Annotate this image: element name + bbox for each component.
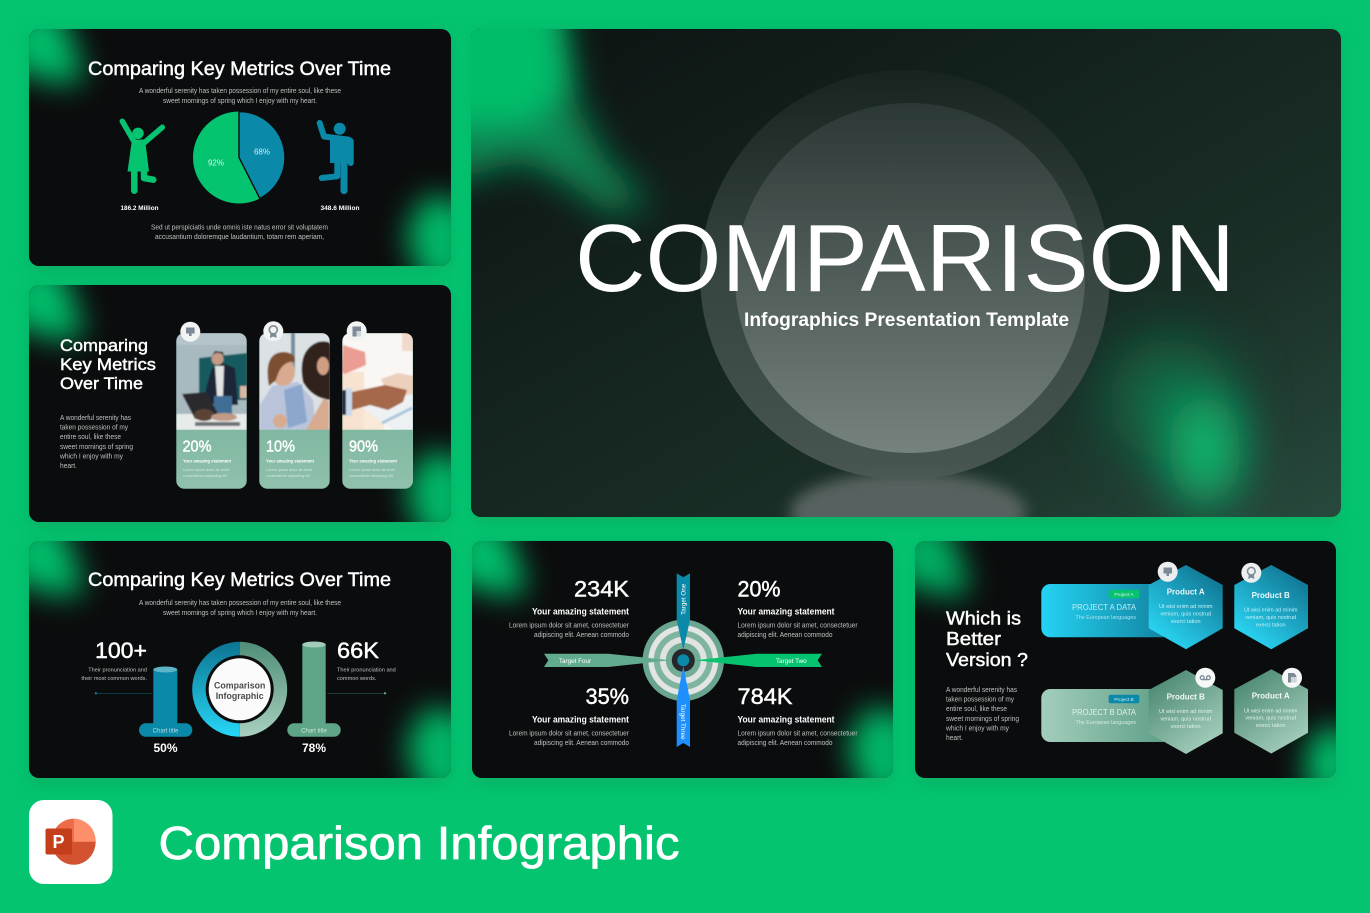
description xyxy=(1244,608,1298,628)
body text: A wonderful serenity has xyxy=(946,687,1017,694)
stat: 234K: 234K xyxy=(574,576,629,602)
lorem: Lorem ipsum dolor sit amet xyxy=(349,468,396,472)
lorem: adipiscing elit. Aenean commodo xyxy=(534,632,629,639)
icon: tape xyxy=(1195,668,1215,688)
description xyxy=(1159,709,1213,730)
target rings xyxy=(643,620,724,701)
body text: taken possession of my xyxy=(60,425,128,432)
description: exerci tation xyxy=(1256,723,1286,729)
hexagon: product A top xyxy=(1149,562,1223,649)
stat: 234K xyxy=(509,576,630,639)
description: Ut wisi enim ad minim xyxy=(1159,709,1213,715)
donut chart xyxy=(192,642,287,737)
icon: PowerPoint app: P xyxy=(52,832,65,852)
project subtitle: The European languages xyxy=(1075,720,1136,726)
body text: heart. xyxy=(60,463,77,470)
description: Ut wisi enim ad minim xyxy=(1244,608,1298,614)
arrow label: Target Three xyxy=(679,704,686,740)
heading xyxy=(60,336,156,393)
caption left: Their pronunciation and xyxy=(88,668,147,674)
stat: 66K: 66K xyxy=(337,638,379,663)
statement: Your amazing statement xyxy=(738,714,834,724)
heading: Better xyxy=(946,629,1001,649)
stat: 20% xyxy=(182,438,212,455)
body text: sweet mornings of spring xyxy=(60,444,133,451)
description: exerci tation xyxy=(1171,724,1201,730)
body text: taken possession of my xyxy=(946,697,1014,704)
lorem xyxy=(738,730,858,747)
description: exerci tation xyxy=(1256,622,1286,628)
body text xyxy=(59,415,133,470)
circular icon: document xyxy=(347,321,367,341)
stat: 100+: 100+ xyxy=(95,638,147,663)
icon: screen xyxy=(1158,562,1178,582)
description: veniam, quis nostrud xyxy=(1245,716,1296,722)
lorem: Lorem ipsum dolor sit amet xyxy=(183,468,230,472)
arrow: target two xyxy=(695,654,822,667)
circular icon: award xyxy=(263,321,283,341)
heading: Version ? xyxy=(946,650,1028,670)
lorem: Lorem ipsum dolor sit amet, consectetuer xyxy=(738,730,858,738)
description xyxy=(1244,708,1298,729)
pie value green: 92% xyxy=(208,158,224,168)
icon: award xyxy=(1241,563,1261,583)
lorem: Lorem ipsum dolor sit amet, consectetuer xyxy=(738,622,858,630)
statement: Your amazing statement xyxy=(349,458,397,463)
pie value blue: 68% xyxy=(254,148,270,156)
heading: Which is xyxy=(946,608,1021,628)
project title: PROJECT A DATA xyxy=(1072,603,1137,612)
lorem xyxy=(183,468,230,478)
lorem: consectetuer adipiscing elit xyxy=(183,474,228,478)
intro text xyxy=(139,88,341,105)
icon: PowerPoint app xyxy=(29,800,112,884)
stat: 90% xyxy=(349,438,378,455)
statement: Your amazing statement xyxy=(532,714,629,724)
hexagon: product B bottom xyxy=(1149,668,1223,754)
lorem: Lorem ipsum dolor sit amet, consectetuer xyxy=(509,730,630,738)
caption right xyxy=(337,668,396,682)
stat: 784K: 784K xyxy=(738,684,793,709)
body text: entire soul, like these xyxy=(946,706,1007,713)
lorem: Lorem ipsum dolor sit amet xyxy=(266,468,313,472)
panel: cylinder and donut chart xyxy=(29,541,451,778)
description: veniam, quis nostrud xyxy=(1245,615,1296,621)
card 2 xyxy=(259,321,330,489)
donut label: Infographic xyxy=(216,691,264,701)
label: Product A xyxy=(1252,692,1290,700)
subheading: Infographics Presentation Template xyxy=(744,310,1069,331)
heading: Over Time xyxy=(60,374,143,393)
lorem xyxy=(738,622,858,639)
label: right value: 348.6 Million xyxy=(320,205,360,212)
arrow: target three xyxy=(677,666,690,747)
heading: Comparing Key Metrics Over Time xyxy=(88,59,391,80)
intro text: sweet mornings of spring which I enjoy with my heart. xyxy=(163,98,317,105)
arrow label: Target One xyxy=(680,583,688,615)
caption left xyxy=(81,668,147,682)
description: veniam, quis nostrud xyxy=(1160,716,1211,722)
donut label: Comparison xyxy=(214,680,265,690)
body text: A wonderful serenity has xyxy=(60,415,131,422)
body text xyxy=(945,687,1019,742)
circular icon: screen xyxy=(180,322,200,342)
leader line left xyxy=(95,692,152,694)
cylinder left xyxy=(139,666,192,737)
footer text xyxy=(151,224,328,241)
body text: sweet mornings of spring xyxy=(946,716,1019,723)
main heading: COMPARISON xyxy=(575,205,1235,312)
lorem: Lorem ipsum dolor sit amet, consectetuer xyxy=(509,622,630,630)
icon: woman figure xyxy=(122,121,162,191)
panel: pie chart comparison xyxy=(29,29,451,266)
tag: Project B xyxy=(1114,697,1134,703)
photo: handshake xyxy=(342,333,413,430)
label: Product B xyxy=(1167,692,1205,702)
cylinder label: Chart title xyxy=(153,728,179,734)
description xyxy=(1159,604,1213,625)
lorem: adipiscing elit. Aenean commodo xyxy=(738,632,833,639)
heading: Comparing xyxy=(60,336,148,355)
statement: Your amazing statement xyxy=(183,458,231,463)
photo: two women at work xyxy=(259,333,330,430)
panel: photo cards xyxy=(29,285,451,522)
project title: PROJECT B DATA xyxy=(1072,708,1137,717)
statement: Your amazing statement xyxy=(532,606,629,616)
card 1 xyxy=(176,322,247,489)
lorem xyxy=(349,468,396,478)
tag: Project A xyxy=(1114,592,1134,598)
stat: 35%: 35% xyxy=(586,684,629,709)
body text: which I enjoy with my xyxy=(59,453,123,460)
cylinder right xyxy=(287,642,341,737)
value 78%: 78% xyxy=(302,741,326,755)
label: Product B xyxy=(1252,591,1290,600)
panel: product comparison hexagons xyxy=(915,541,1336,778)
panel: target chart xyxy=(472,541,893,778)
description: Ut wisi enim ad minim xyxy=(1159,604,1213,610)
product title: Comparison Infographic xyxy=(158,817,680,869)
description: veniam, quis nostrud xyxy=(1160,612,1211,618)
intro text: A wonderful serenity has taken possession of my entire soul, like these xyxy=(139,600,341,607)
heading: Key Metrics xyxy=(60,355,156,374)
body text: which I enjoy with my xyxy=(945,725,1009,732)
lorem xyxy=(266,468,313,478)
caption right: Their pronunciation and xyxy=(337,668,396,674)
caption left: their most common words. xyxy=(81,676,147,682)
stat: 20% xyxy=(738,576,858,639)
arrow: target four xyxy=(544,654,670,667)
project B bar xyxy=(1041,689,1171,742)
intro text: A wonderful serenity has taken possession of my entire soul, like these xyxy=(139,88,341,95)
lorem: adipiscing elit. Aenean commodo xyxy=(534,740,629,747)
body text: heart. xyxy=(946,735,963,742)
heading: Comparing Key Metrics Over Time xyxy=(88,570,391,591)
donut label xyxy=(214,680,265,701)
hexagon: product B top xyxy=(1234,563,1308,649)
lorem: adipiscing elit. Aenean commodo xyxy=(738,740,833,747)
icon: man figure xyxy=(320,123,351,191)
stat: 10% xyxy=(266,438,295,455)
arrow label: Target Four xyxy=(559,658,591,665)
project A bar xyxy=(1041,584,1171,637)
value 50%: 50% xyxy=(153,741,178,755)
heading xyxy=(946,608,1028,670)
arrow: target one xyxy=(677,573,690,650)
photo: presenter at laptop xyxy=(176,333,247,430)
stat: 35% xyxy=(509,684,630,747)
label: Product A xyxy=(1167,587,1205,596)
lorem: consectetuer adipiscing elit xyxy=(266,474,311,478)
arrow label: Target Two xyxy=(776,658,807,665)
hexagon: product A bottom xyxy=(1234,668,1308,754)
lorem: consectetuer adipiscing elit xyxy=(349,474,394,478)
project subtitle: The European languages xyxy=(1075,615,1136,621)
footer text: Sed ut perspiciatis unde omnis iste natus error sit voluptatem xyxy=(151,224,328,232)
statement: Your amazing statement xyxy=(266,458,314,463)
footer text: accusantium doloremque laudantium, totam rem aperiam, xyxy=(155,234,324,241)
icon: document xyxy=(1282,668,1302,688)
stat: 20%: 20% xyxy=(738,576,780,602)
panel: title slide xyxy=(471,29,1341,517)
lorem xyxy=(509,622,630,639)
intro text: sweet mornings of spring which I enjoy with my heart. xyxy=(163,610,317,617)
caption right: common words. xyxy=(337,676,377,682)
stat: 784K xyxy=(738,684,858,747)
label: left value: 186.2 Million xyxy=(120,205,158,212)
statement: Your amazing statement xyxy=(738,606,834,616)
body text: entire soul, like these xyxy=(60,434,121,441)
intro text xyxy=(139,600,341,617)
description: Ut wisi enim ad minim xyxy=(1244,708,1298,714)
card 3 xyxy=(342,321,413,489)
lorem xyxy=(509,730,630,747)
description: exerci tation xyxy=(1171,619,1201,625)
pie chart xyxy=(193,112,285,204)
leader line right xyxy=(327,692,386,694)
cylinder label: Chart title xyxy=(301,728,327,734)
